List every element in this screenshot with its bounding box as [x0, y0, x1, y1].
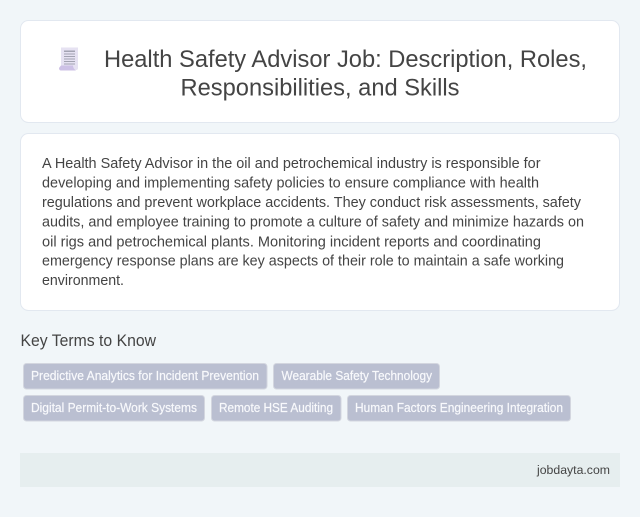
title: Responsibilities, and Skills — [180, 74, 460, 102]
key term chips — [24, 364, 570, 421]
heading: key terms: Key Terms to Know — [20, 332, 156, 350]
chip: wearable safety technology — [274, 364, 440, 389]
description text: oil rigs and petrochemical plants. Monitoring incident reports and coordinating — [42, 234, 541, 250]
title — [104, 46, 587, 102]
description text — [42, 156, 584, 289]
chip: remote hse auditing — [212, 396, 341, 421]
description text: audits, and employee training to promote a culture of safety and minimize hazards on — [42, 214, 584, 230]
description text: A Health Safety Advisor in the oil and petrochemical industry is responsible for — [42, 156, 541, 172]
chip: wearable safety technology: Wearable Safety Technology — [282, 369, 433, 383]
chip: digital permit-to-work — [24, 396, 204, 421]
description text: environment. — [42, 273, 124, 289]
chip: predictive analytics: Predictive Analytics for Incident Prevention — [31, 369, 259, 383]
description text: emergency response plans are key aspects of their role to maintain a safe working — [42, 254, 564, 270]
chip: digital permit-to-work: Digital Permit-to-Work Systems — [31, 401, 197, 415]
footer bar — [20, 453, 620, 487]
description text: regulations and prevent workplace accidents. They conduct risk assessments, safety — [42, 195, 582, 211]
chip: remote hse auditing: Remote HSE Auditing — [219, 401, 333, 415]
panel: title card — [20, 20, 620, 122]
chip: human factors engineering — [348, 396, 570, 421]
chip: predictive analytics — [24, 364, 267, 389]
icon: document scroll — [59, 48, 78, 70]
title: Health Safety Advisor Job: Description, Roles, — [104, 46, 587, 73]
panel: description — [20, 134, 620, 310]
chip: human factors engineering: Human Factors Engineering Integration — [355, 401, 563, 415]
footer source text: jobdayta.com — [536, 463, 610, 477]
description text: developing and implementing safety policies to ensure compliance with health — [42, 176, 539, 192]
